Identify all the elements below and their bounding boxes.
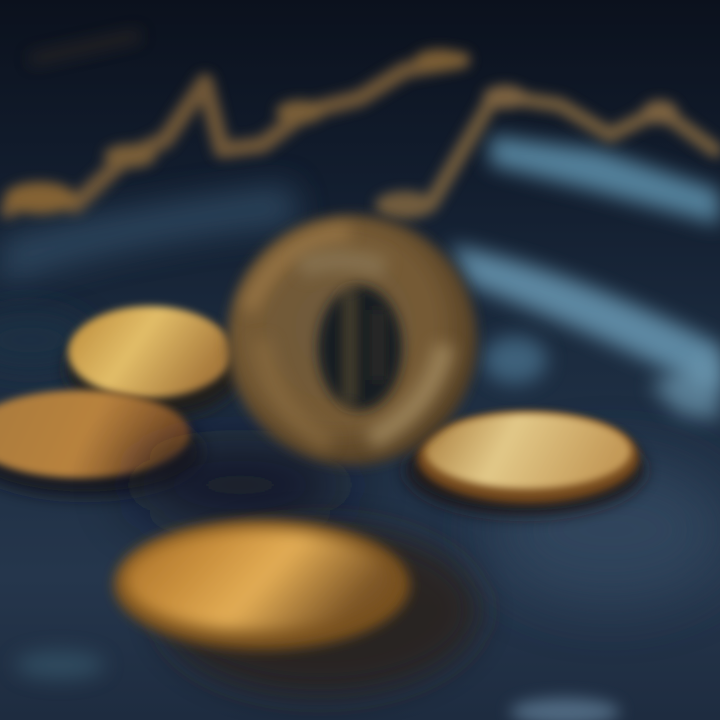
coin: front bottom xyxy=(114,520,480,695)
icon: dark coin symbol xyxy=(318,286,402,410)
coin: far left xyxy=(0,390,203,497)
coin: right xyxy=(405,411,645,516)
line chart: faint upper trace xyxy=(30,35,140,60)
shadow: beneath centre coin xyxy=(130,449,350,521)
line chart: gold trend line xyxy=(4,49,715,219)
coin: back left xyxy=(67,306,243,418)
coin: large upright centre with dark symbol xyxy=(227,215,477,465)
